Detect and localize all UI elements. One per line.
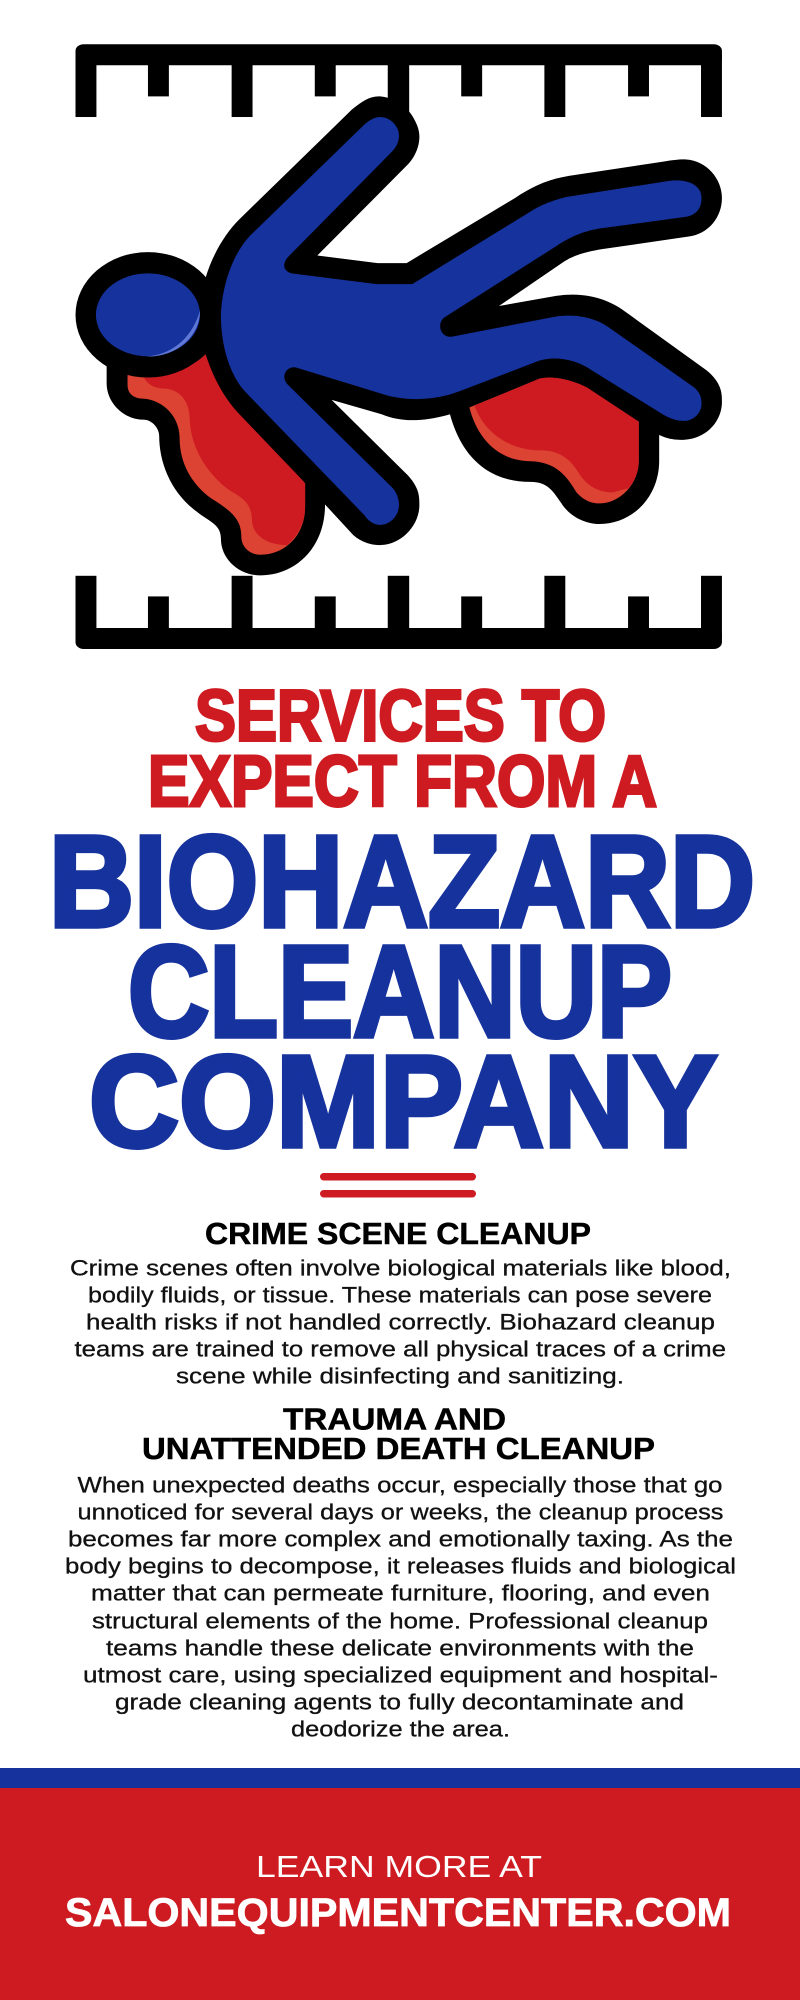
- icon: top ruler: [76, 44, 722, 117]
- double red divider: [320, 1173, 476, 1198]
- heading: crime scene cleanup: CRIME SCENE CLEANUP: [205, 1216, 591, 1251]
- footer text: learn more at: LEARN MORE AT: [256, 1849, 542, 1884]
- text block: trauma and unattended death cleanup: When unexpected deaths occur, especially those that go: [78, 1472, 722, 1497]
- icon: head: [76, 252, 220, 378]
- text block: trauma and unattended death cleanup: structural elements of the home. Professional cleanup: [92, 1609, 708, 1634]
- text block: trauma and unattended death cleanup: becomes far more complex and emotionally taxing. As the: [68, 1526, 733, 1551]
- text block: crime scene cleanup: Crime scenes often involve biological materials like blood,: [70, 1256, 731, 1280]
- text block: crime scene cleanup: teams are trained to remove all physical traces of a crime: [74, 1337, 726, 1362]
- text block: trauma and unattended death cleanup: unnoticed for several days or weeks, the cleanup process: [78, 1499, 724, 1524]
- title line: SERVICES TO: [195, 676, 606, 756]
- title line: EXPECT FROM A: [148, 742, 657, 822]
- title line: CLEANUP: [128, 918, 672, 1064]
- text block: trauma and unattended death cleanup: grade cleaning agents to fully decontaminate and: [115, 1690, 684, 1715]
- text block: trauma and unattended death cleanup: [65, 1472, 736, 1742]
- heading: trauma and unattended death cleanup: [142, 1402, 655, 1466]
- text block: trauma and unattended death cleanup: body begins to decompose, it releases fluids and biological: [65, 1554, 736, 1578]
- icon: crime scene body outline between rulers: [76, 44, 722, 649]
- heading: trauma and unattended death cleanup: UNATTENDED DEATH CLEANUP: [142, 1431, 655, 1466]
- icon: right blood pool: [449, 370, 659, 524]
- title: biohazard cleanup company: [49, 808, 755, 1174]
- text block: crime scene cleanup: [70, 1256, 731, 1389]
- text block: trauma and unattended death cleanup: teams handle these delicate environments with the: [106, 1636, 694, 1661]
- title line: COMPANY: [89, 1028, 717, 1174]
- icon: left blood pool: [107, 345, 325, 575]
- text block: trauma and unattended death cleanup: utmost care, using specialized equipment and hospital-: [83, 1663, 718, 1688]
- icon: bottom ruler: [76, 576, 722, 649]
- footer text: website: SALONEQUIPMENTCENTER.COM: [65, 1891, 731, 1935]
- footer panel: [0, 1788, 800, 2000]
- icon: body silhouette: [199, 96, 722, 545]
- text block: crime scene cleanup: scene while disinfecting and sanitizing.: [176, 1364, 624, 1389]
- text block: crime scene cleanup: bodily fluids, or tissue. These materials can pose severe: [88, 1282, 712, 1308]
- text block: crime scene cleanup: health risks if not handled correctly. Biohazard cleanup: [86, 1310, 715, 1335]
- title: services to expect from a: [148, 676, 657, 822]
- heading: trauma and unattended death cleanup: TRAUMA AND: [283, 1402, 506, 1437]
- text block: trauma and unattended death cleanup: matter that can permeate furniture, flooring, and even: [91, 1580, 710, 1606]
- text block: trauma and unattended death cleanup: deodorize the area.: [291, 1717, 510, 1742]
- blue band: [0, 1768, 800, 1788]
